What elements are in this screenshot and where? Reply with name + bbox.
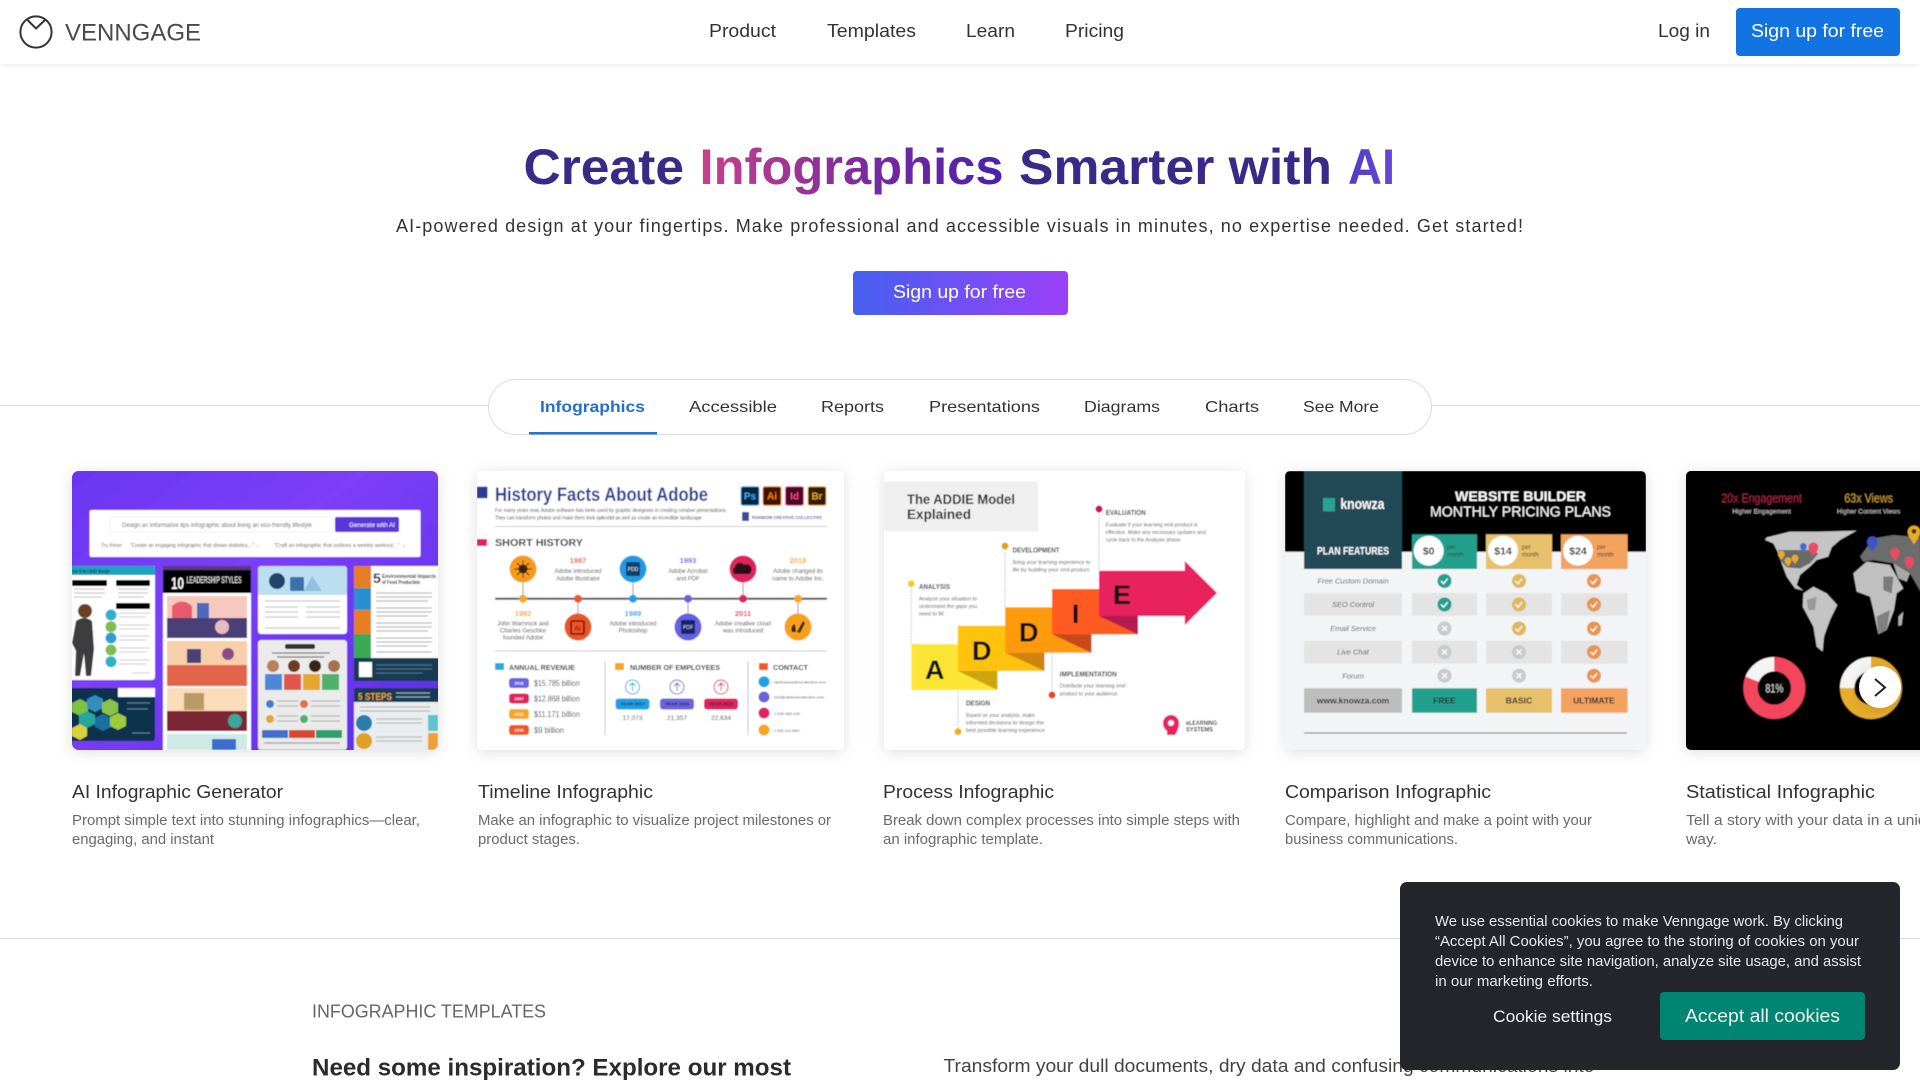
footer row: www.knowza.com	[1316, 696, 1390, 706]
price headers: $14	[1494, 546, 1512, 558]
price headers	[1412, 534, 1628, 569]
footer row: ULTIMATE	[1573, 696, 1615, 706]
hero call-to-action button: Sign up for free	[893, 282, 1026, 302]
step notes: Analyze your situation to	[919, 596, 977, 602]
stat headings	[1721, 492, 1900, 516]
prompt box: Generate with AI	[349, 522, 395, 529]
card description: an infographic template.	[883, 832, 1043, 848]
template: leadership styles: LEADERSHIP STYLES	[186, 575, 242, 585]
nav links: Pricing	[1065, 21, 1124, 41]
card description: product stages.	[478, 832, 580, 848]
active tab: Infographics	[529, 399, 657, 434]
card: AI Infographic Generator	[68, 471, 444, 848]
timeline	[495, 556, 827, 640]
donut chart: 81%	[1743, 657, 1805, 719]
other tabs: Diagrams	[1084, 399, 1160, 416]
footer row: FREE	[1433, 696, 1456, 706]
step notes: Based on your analysis, make	[966, 713, 1035, 719]
annual revenue: $12.868 billion	[534, 695, 580, 704]
top navigation bar	[0, 0, 1920, 64]
stat headings: Higher Engagement	[1732, 510, 1791, 516]
annual revenue: ANNUAL REVENUE	[509, 663, 575, 672]
other tabs: Accessible	[689, 399, 777, 416]
thumbnail: history facts about Adobe	[477, 486, 828, 736]
step notes: Bring your learning experience to	[1012, 560, 1091, 566]
staircase arrow	[911, 509, 1217, 731]
thumbnail: ADDIE model: The ADDIE Model	[907, 492, 1015, 507]
timeline: PDF	[683, 625, 693, 631]
cookie text: device to enhance site navigation, analyze site usage, and assist	[1435, 954, 1861, 970]
number of employees: 17,073	[623, 715, 643, 722]
stat headings: Higher Content Views	[1837, 510, 1900, 516]
step notes: EVALUATION	[1106, 510, 1146, 517]
card description: engaging, and instant	[72, 832, 214, 848]
knowza logo: knowza	[1340, 497, 1385, 513]
other tabs: Presentations	[929, 399, 1040, 416]
other tabs: Charts	[1205, 399, 1259, 416]
timeline labels: and PDF	[676, 576, 700, 582]
staircase arrow: I	[1072, 599, 1079, 629]
step notes: Evaluate if your learning end-product is	[1106, 522, 1198, 528]
number of employees: YEAR 2016	[665, 702, 690, 707]
thumbnail: AI generator collage	[68, 471, 444, 758]
cookie text: “Accept All Cookies”, you agree to the storing of cookies on your	[1435, 934, 1859, 950]
timeline labels: Adobe creative cloud	[715, 622, 771, 628]
annual revenue: 2016	[515, 712, 524, 716]
thumbnail: pricing plans table	[1285, 471, 1646, 750]
price headers: month	[1522, 552, 1539, 558]
template: food production: of Food Production	[382, 580, 420, 586]
thumbnail: world map statistics	[1686, 471, 1920, 750]
thumbnail: history facts about Adobe: RAINBOW CREATIVE COLLECTIVE	[752, 515, 822, 520]
world map	[1765, 531, 1920, 652]
logo: Venngage: VENNGAGE	[65, 20, 201, 46]
contact: 1-505-123-4567	[774, 728, 801, 733]
hero title: Smarter with	[1019, 139, 1332, 195]
feature rows: Email Service	[1330, 624, 1376, 633]
card heading: Comparison Infographic	[1285, 782, 1491, 802]
step notes: need to fill.	[919, 611, 945, 617]
timeline labels: Adobe introduced	[554, 569, 602, 575]
timeline labels: Adobe introduced	[609, 622, 657, 628]
app icons: Br	[811, 492, 823, 502]
active tab: Infographics: Infographics	[540, 399, 645, 416]
nav links: Product	[709, 21, 776, 41]
template: leadership styles: 10	[171, 574, 184, 593]
step notes: understand the gaps you	[919, 604, 977, 610]
price headers: per	[1522, 545, 1531, 551]
step notes: DEVELOPMENT	[1012, 548, 1060, 554]
logo: Venngage	[20, 16, 201, 48]
annual revenue: $11.171 billion	[534, 710, 580, 719]
prompt box: "Craft an infographic that outlines a weekly workout..." →	[274, 543, 406, 549]
card description: Make an infographic to visualize project milestones or	[478, 813, 831, 829]
step notes	[908, 506, 1206, 735]
price headers: $24	[1569, 546, 1587, 558]
step notes: life by building your end-product.	[1012, 568, 1090, 574]
timeline labels: John Warnrock and	[497, 622, 549, 628]
annual revenue: 2017	[515, 696, 524, 701]
step notes: ANALYSIS	[919, 584, 950, 591]
logo: eLearning Systems: eLEARNING	[1186, 721, 1217, 727]
annual revenue: 2015	[515, 728, 524, 732]
other tabs: Reports	[821, 399, 884, 416]
contact: info@rainbowcollective.com	[774, 694, 825, 700]
donut chart: 81%: 81%	[1765, 682, 1784, 696]
hero title	[524, 139, 1395, 195]
price headers: month	[1597, 552, 1614, 558]
cookie text: We use essential cookies to make Venngage work. By clicking	[1435, 914, 1843, 930]
app icons: Id	[790, 492, 799, 502]
card description: Tell a story with your data in a unique	[1686, 813, 1920, 829]
thumbnail: ADDIE model	[884, 482, 1218, 736]
card description	[72, 813, 420, 848]
timeline labels: 2011	[735, 609, 751, 618]
feature rows: Forum	[1342, 672, 1364, 680]
template: food production: 5 STEPS	[358, 692, 392, 703]
knowza logo	[1323, 497, 1385, 513]
staircase arrow: D	[1019, 618, 1038, 648]
template: manager: How To Be a Better Manager	[72, 569, 110, 575]
nav links: Learn	[966, 21, 1015, 41]
feature rows: Live Chat	[1337, 648, 1370, 657]
thumbnail: history facts about Adobe: For many years now, Adobe software has been used by graphic designers in creating creative presentations.	[495, 508, 727, 514]
number of employees	[615, 663, 738, 722]
timeline labels: founded Adobe	[503, 636, 544, 642]
timeline labels: Photoshop	[619, 628, 648, 634]
nav links: Templates	[827, 21, 916, 41]
number of employees: YEAR 2017	[620, 702, 645, 707]
hero title: Create	[524, 139, 684, 195]
price headers: per	[1447, 545, 1456, 551]
section paragraph: Transform your dull documents, dry data and confusing communications into	[944, 1056, 1594, 1076]
step notes: best possible learning experience.	[966, 728, 1046, 734]
contact: 1-530-589-100	[774, 711, 801, 716]
card description	[883, 813, 1240, 848]
step notes: cycle back to the Analysis phase.	[1106, 538, 1182, 544]
thumbnail: pricing plans table: WEBSITE BUILDER	[1455, 488, 1586, 504]
staircase arrow: A	[925, 655, 945, 685]
number of employees: YEAR 2015	[709, 702, 734, 707]
card description: way.	[1685, 832, 1717, 848]
number of employees: NUMBER OF EMPLOYEES	[630, 663, 720, 672]
hero subtitle: AI-powered design at your fingertips. Make professional and accessible visuals in minutes, no expertise needed. Get started!	[396, 216, 1523, 236]
section divider	[0, 938, 1920, 940]
map pins	[1778, 526, 1920, 569]
annual revenue	[495, 663, 580, 735]
price headers: month	[1447, 552, 1464, 558]
contact: rainbowcreativecollective.com	[774, 680, 827, 684]
card description	[1685, 813, 1920, 848]
number of employees: 21,357	[667, 715, 687, 722]
card heading: Process Infographic	[883, 782, 1054, 802]
timeline labels: Charles Geschke	[500, 628, 547, 634]
thumbnail: pricing plans table: MONTHLY PRICING PLANS	[1430, 504, 1611, 520]
card description: business communications.	[1285, 832, 1458, 848]
annual revenue: $9 billion	[534, 726, 564, 735]
tab bar	[0, 380, 1920, 434]
step notes: DESIGN	[966, 701, 990, 708]
timeline: Ai	[574, 626, 581, 632]
other tabs: See More	[1303, 399, 1379, 416]
step notes: Distribute your learning end-	[1060, 684, 1127, 690]
card description	[478, 813, 831, 848]
timeline labels: 1982	[515, 609, 531, 618]
card heading: Timeline Infographic	[478, 782, 653, 802]
contact: CONTACT	[773, 663, 808, 672]
cookie text: in our marketing efforts.	[1435, 974, 1593, 990]
prompt box: Try these	[101, 543, 122, 549]
cookie text	[1435, 914, 1861, 990]
card description: Break down complex processes into simple steps with	[883, 813, 1240, 829]
thumbnail: ADDIE model: Explained	[907, 507, 971, 522]
card description: Compare, highlight and make a point with your	[1285, 813, 1592, 829]
template: hexagons	[68, 688, 155, 741]
timeline labels: Adobe Acrobat	[668, 569, 708, 575]
price headers: per	[1597, 545, 1606, 551]
card: Comparison Infographic	[1285, 471, 1646, 848]
step notes: informed decisions to design the	[966, 721, 1044, 727]
nav links: Log in	[1658, 21, 1710, 41]
other tabs	[689, 399, 1379, 416]
app icons: Ps	[744, 492, 757, 502]
step notes: IMPLEMENTATION	[1060, 672, 1117, 678]
thumbnail: history facts about Adobe: SHORT HISTORY	[495, 537, 583, 549]
number of employees: 22,634	[711, 715, 731, 722]
card: Process Infographic	[883, 471, 1245, 848]
step notes: effective. Make any necessary updates and	[1106, 530, 1206, 536]
timeline: PDD	[628, 567, 639, 573]
annual revenue: 2018	[515, 680, 524, 686]
cookie settings link: Cookie settings	[1493, 1008, 1612, 1026]
accept cookies button	[1660, 992, 1865, 1040]
hero title: Infographics	[700, 139, 1004, 195]
template: food production	[354, 566, 444, 758]
carousel next button	[1859, 666, 1901, 708]
card description	[1285, 813, 1592, 848]
feature rows: Free Custom Domain	[1317, 576, 1389, 586]
footer row: BASIC	[1506, 696, 1532, 706]
card heading: Statistical Infographic	[1686, 782, 1875, 802]
footer row	[1304, 688, 1628, 713]
nav button: sign up: Sign up for free	[1751, 21, 1884, 41]
stat headings: 63x Views	[1844, 492, 1893, 506]
cookie banner	[1400, 882, 1900, 1070]
hero title: AI	[1348, 139, 1395, 195]
annual revenue: $15.785 billion	[534, 679, 580, 688]
prompt box: Design an informative tips infographic about living an eco-friendly lifestyle	[122, 522, 312, 529]
timeline labels: 1989	[625, 609, 641, 618]
thumbnail: history facts about Adobe: They can transform photos and make them look splendid as well as create an incredible landscape.	[495, 516, 703, 522]
nav button: sign up	[1736, 8, 1900, 56]
staircase arrow: D	[972, 636, 991, 666]
prompt box: "Create an engaging infographic that shows statistics..." →	[130, 543, 260, 549]
logo: eLearning Systems: SYSTEMS	[1186, 728, 1213, 734]
timeline labels: 2018	[790, 556, 806, 565]
feature rows: SEO Control	[1332, 600, 1374, 609]
app icons: Ai	[767, 492, 777, 502]
nav links	[709, 21, 1710, 41]
hero call-to-action button	[853, 271, 1068, 315]
section eyebrow: INFOGRAPHIC TEMPLATES	[312, 1002, 546, 1022]
app icons	[741, 487, 826, 505]
timeline labels: 1993	[680, 556, 696, 565]
timeline labels: 1987	[570, 556, 586, 565]
timeline labels: Adobe changed its	[773, 569, 823, 575]
price headers: $0	[1423, 546, 1435, 558]
template: food production: 5	[373, 570, 381, 586]
feature rows	[1304, 574, 1628, 683]
prompt box	[90, 510, 420, 557]
donut chart: second metric	[1847, 664, 1895, 712]
thumbnail: pricing plans table: PLAN FEATURES	[1317, 546, 1389, 558]
staircase arrow: E	[1113, 580, 1131, 610]
card description: Prompt simple text into stunning infographics—clear,	[72, 813, 420, 829]
timeline labels	[497, 556, 824, 642]
template: leadership styles	[163, 566, 251, 756]
card: Statistical Infographic	[1685, 471, 1920, 848]
timeline labels: name to Adobe Inc.	[772, 576, 824, 582]
logo: eLearning Systems	[1163, 715, 1217, 735]
step notes: product to your audience.	[1060, 691, 1119, 697]
timeline labels: Adobe Illustrator	[556, 576, 600, 582]
card: Timeline Infographic	[477, 471, 844, 848]
accept cookies button: Accept all cookies	[1685, 1005, 1840, 1026]
template: employee process	[258, 566, 347, 750]
template: manager	[68, 566, 155, 680]
timeline labels: was introduced	[722, 628, 763, 634]
card heading: AI Infographic Generator	[72, 782, 283, 802]
contact	[758, 663, 827, 736]
stat headings: 20x Engagement	[1721, 492, 1802, 506]
template: food production: Environmental Impacts	[382, 574, 436, 580]
thumbnail: history facts about Adobe: History Facts About Adobe	[495, 485, 708, 506]
